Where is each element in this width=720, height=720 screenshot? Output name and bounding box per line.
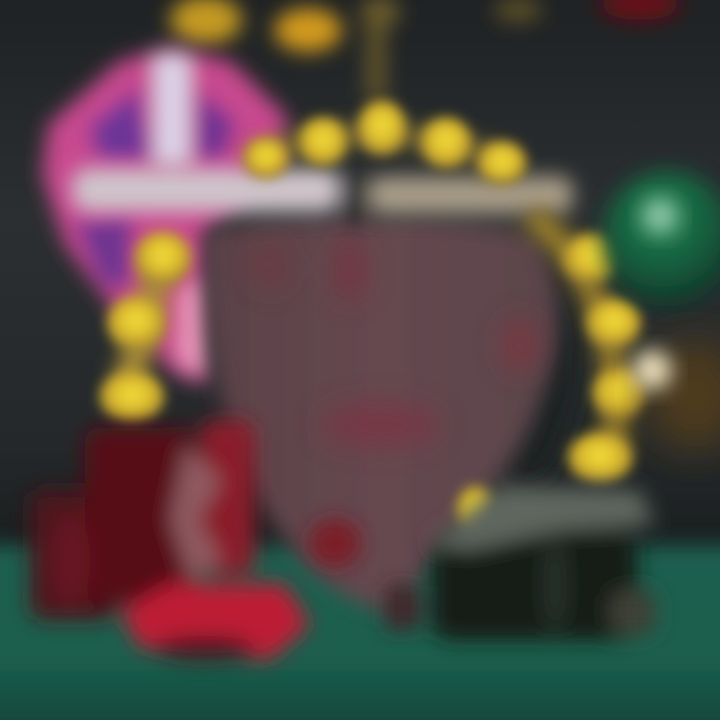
red chip stack [30, 420, 361, 660]
pink and purple wheel [42, 45, 288, 385]
gold light bulbs [99, 100, 648, 534]
black chip stack [385, 485, 655, 640]
green felt table [0, 545, 720, 720]
green ball [602, 170, 720, 306]
heart shaped playing card [205, 220, 558, 612]
card red markings [252, 238, 538, 447]
brown object and white glare [632, 340, 720, 450]
top decorative lights [170, 0, 680, 100]
gold arc of the frame [125, 134, 616, 460]
white marquee banner [72, 168, 573, 222]
dark frame shadow to the right of the card [500, 240, 578, 480]
